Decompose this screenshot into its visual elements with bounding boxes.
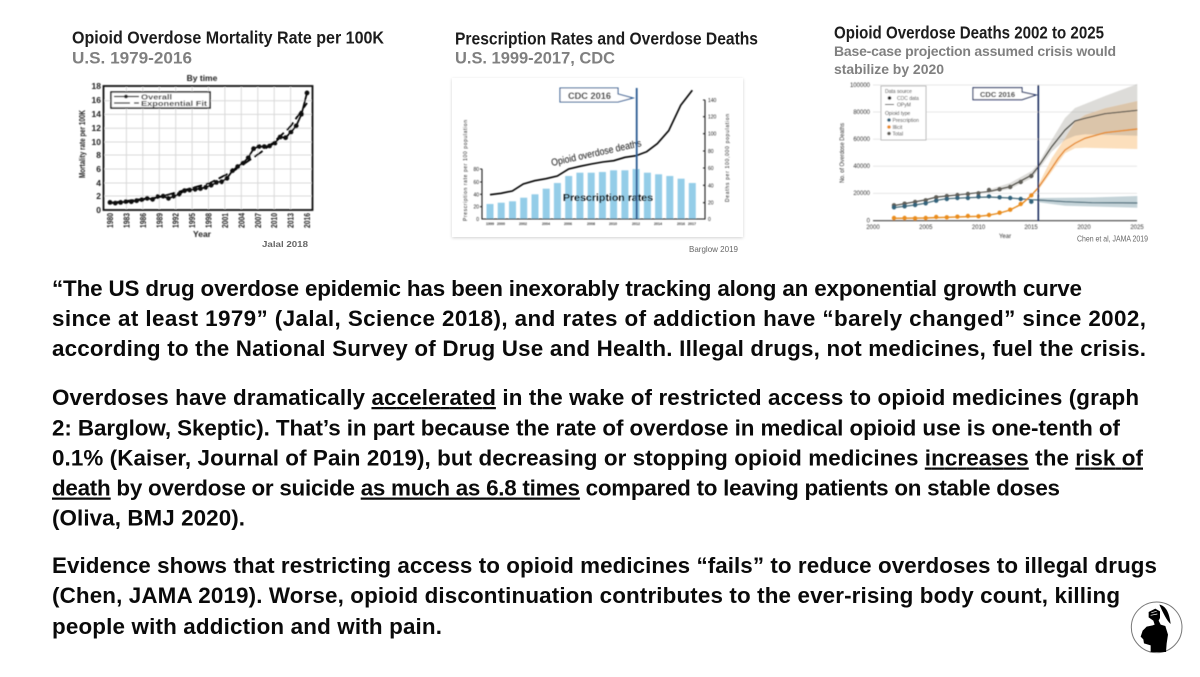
combo chart: bars and death line: 0	[708, 217, 711, 223]
dots: total	[892, 174, 1034, 208]
line chart: mortality rate by time: 1980	[105, 213, 115, 228]
line chart: mortality rate by time: 1983	[121, 213, 131, 228]
callout: CDC 2016	[560, 88, 633, 102]
line chart: mortality rate by time: 1998	[204, 213, 214, 228]
text block: paragraph 1	[52, 276, 1146, 361]
dots: prescription	[892, 194, 1034, 210]
callout: CDC 2016: CDC 2016	[980, 90, 1015, 99]
combo chart: bars and death line: 40	[708, 183, 714, 189]
dots: illicit	[892, 193, 1034, 220]
subheading: mortality rate years: U.S. 1979-2016	[72, 48, 192, 68]
combo chart: bars and death line: 2016	[677, 222, 685, 226]
combo chart: bars and death line: 1999	[486, 222, 494, 226]
line chart: projections: 2020	[1077, 225, 1091, 231]
combo chart: bars and death line: 60	[473, 180, 479, 186]
line chart: mortality rate by time: 2007	[253, 213, 263, 228]
combo chart: bars and death line: 2002	[519, 222, 527, 226]
line chart: mortality rate by time: Mortality rate per 100K	[77, 109, 87, 178]
combo chart: bars and death line: 2017	[688, 222, 696, 226]
subheading: prescription years: U.S. 1999-2017, CDC	[455, 48, 615, 68]
line chart: mortality rate by time: Exponential Fit	[141, 99, 208, 108]
line chart: mortality rate by time: 2001	[220, 213, 230, 228]
combo chart: bars and death line: 2012	[632, 222, 640, 226]
legend: Illicit	[892, 125, 903, 131]
line: illicit	[893, 129, 1137, 218]
text block: paragraph 2: death by overdose or suicide as much as 6.8 times compared to leaving patients on stable doses	[52, 476, 1060, 500]
line chart: mortality rate by time: 2010	[269, 213, 279, 228]
text block: paragraph 3: people with addiction and with pain.	[52, 614, 442, 639]
line chart: projections: 100000	[850, 83, 871, 89]
line chart: mortality rate by time: By time	[187, 73, 218, 83]
legend: Opioid type	[885, 111, 911, 117]
combo chart: bars and death line: 2004	[542, 222, 550, 226]
panel: overdose deaths projection chart	[834, 22, 1148, 244]
legend: OPyM	[897, 102, 911, 108]
line chart: projections: 2015	[1024, 225, 1038, 231]
combo chart: bars and death line: 140	[708, 98, 717, 104]
text block: paragraph 1: according to the National Survey of Drug Use and Health. Illegal drugs, not medicines, fuel the crisis.	[52, 336, 1146, 361]
combo chart: bars and death line: 2008	[587, 222, 595, 226]
heading: mortality rate: Opioid Overdose Mortality Rate per 100K	[72, 28, 384, 48]
line chart: mortality rate by time: 1995	[187, 213, 197, 228]
band: blue prescription range	[1038, 196, 1137, 208]
line chart: projections: 2005	[919, 225, 933, 231]
line chart: mortality rate by time: 2004	[236, 213, 246, 228]
callout: CDC 2016	[973, 88, 1036, 100]
combo chart: bars and death line: 80	[473, 167, 479, 173]
text block: paragraph 1: “The US drug overdose epidemic has been inexorably tracking along an exponential growth curve	[52, 276, 1082, 301]
line chart: projections: 2000	[866, 225, 880, 231]
line chart: mortality rate by time: 12	[92, 123, 101, 133]
text block: paragraph 2: 2: Barglow, Skeptic). That’s in part because the rate of overdose in medical opioid use is one-tenth of	[52, 416, 1121, 440]
combo chart: bars and death line: 2014	[654, 222, 662, 226]
line chart: mortality rate by time: 16	[92, 95, 101, 105]
subheading: projection assumption	[834, 43, 1116, 77]
line chart: mortality rate by time: 8	[96, 150, 101, 160]
line chart: projections: 60000	[853, 137, 871, 143]
legend: CDC data	[897, 96, 919, 102]
text block: paragraph 2: (Oliva, BMJ 2020).	[52, 506, 245, 530]
combo chart: bars and death line: Deaths per 100,000 population	[725, 114, 731, 202]
line chart: mortality rate by time: 14	[92, 109, 101, 119]
line chart: mortality rate by time: 18	[92, 81, 101, 91]
line chart: projections: 2010	[972, 225, 986, 231]
line chart: mortality rate by time: 6	[96, 164, 101, 174]
line chart: mortality rate by time: 4	[96, 178, 101, 188]
line chart: mortality rate by time: 1986	[138, 213, 148, 228]
panel: prescription rates chart	[452, 28, 758, 254]
text block: paragraph 3: (Chen, JAMA 2019). Worse, opioid discontinuation contributes to the ever-rising body count, killing	[52, 583, 1120, 608]
combo chart: bars and death line: 40	[473, 192, 479, 198]
line chart: mortality rate by time: 2016	[302, 213, 312, 228]
panel: mortality rate chart	[72, 28, 384, 249]
line chart: mortality rate by time: 1992	[171, 213, 181, 228]
heading: prescription rates: Prescription Rates and Overdose Deaths	[455, 28, 758, 48]
bars: prescription rates	[486, 169, 696, 219]
line chart: mortality rate by time: 10	[92, 137, 101, 147]
combo chart: bars and death line: 2000	[497, 222, 505, 226]
heading: overdose deaths: Opioid Overdose Deaths 2002 to 2025	[834, 22, 1104, 42]
card background	[452, 78, 743, 238]
line: total	[893, 110, 1137, 206]
line chart: projections: Year	[999, 234, 1011, 240]
combo chart: bars and death line: 20	[473, 205, 479, 211]
line chart: projections: 2025	[1130, 225, 1144, 231]
combo chart: bars and death line: Prescription rate per 100 population	[463, 120, 469, 221]
combo chart: bars and death line: Prescription rates	[563, 193, 654, 204]
band: gray total range	[988, 84, 1137, 193]
source: Barglow 2019: Barglow 2019	[689, 244, 738, 254]
icon: raised fist logo	[1131, 602, 1182, 653]
combo chart: bars and death line: 2006	[564, 222, 572, 226]
line chart: mortality rate by time: Overall	[141, 92, 172, 102]
line chart: mortality rate by time: 2013	[286, 213, 296, 228]
legend: Prescription	[892, 118, 919, 124]
combo chart: bars and death line	[463, 88, 731, 226]
line chart: projections: No. of Overdose Deaths	[840, 123, 846, 183]
combo chart: bars and death line: Opioid overdose deaths	[550, 138, 642, 169]
line chart: projections: 0	[867, 218, 871, 224]
combo chart: bars and death line: 120	[708, 115, 717, 121]
line chart: projections	[840, 83, 1144, 240]
line chart: mortality rate by time: 2	[96, 191, 101, 201]
combo chart: bars and death line: 80	[708, 149, 714, 155]
line chart: projections: 80000	[853, 110, 871, 116]
subheading: projection assumption: Base-case projection assumed crisis would	[834, 43, 1116, 59]
text block: paragraph 2	[52, 385, 1144, 530]
text block: paragraph 2: Overdoses have dramatically accelerated in the wake of restricted access to opioid medicines (graph	[52, 385, 1139, 410]
line chart: mortality rate by time: 1989	[154, 213, 164, 228]
combo chart: bars and death line: 60	[708, 166, 714, 172]
source: Chen et al: Chen et al, JAMA 2019	[1077, 234, 1148, 244]
combo chart: bars and death line: 0	[476, 217, 479, 223]
source: Jalal 2018: Jalal 2018	[262, 240, 309, 249]
subheading: projection assumption: stabilize by 2020	[834, 61, 944, 77]
line: prescription	[893, 197, 1137, 208]
text block: paragraph 1: since at least 1979” (Jalal, Science 2018), and rates of addiction have “barely changed” since 2002,	[52, 306, 1146, 331]
line chart: mortality rate by time: Year	[193, 229, 212, 239]
line chart: mortality rate by time	[77, 73, 313, 239]
combo chart: bars and death line: 20	[708, 201, 714, 207]
line chart: projections: 40000	[853, 164, 871, 170]
line chart: mortality rate by time: 0	[96, 205, 101, 215]
line chart: projections: 20000	[853, 191, 871, 197]
legend: Total	[892, 132, 903, 138]
text block: paragraph 3	[52, 553, 1157, 639]
combo chart: bars and death line: 2010	[609, 222, 617, 226]
text block: paragraph 2: 0.1% (Kaiser, Journal of Pain 2019), but decreasing or stopping opioid medicines increases the risk of	[52, 446, 1144, 470]
legend	[881, 86, 926, 140]
legend: Data source	[885, 89, 912, 95]
combo chart: bars and death line: 100	[708, 132, 717, 138]
band: orange illicit range	[1038, 101, 1137, 190]
text block: paragraph 3: Evidence shows that restricting access to opioid medicines “fails” to reduce overdoses to illegal drugs	[52, 553, 1157, 578]
callout: CDC 2016: CDC 2016	[568, 91, 611, 102]
